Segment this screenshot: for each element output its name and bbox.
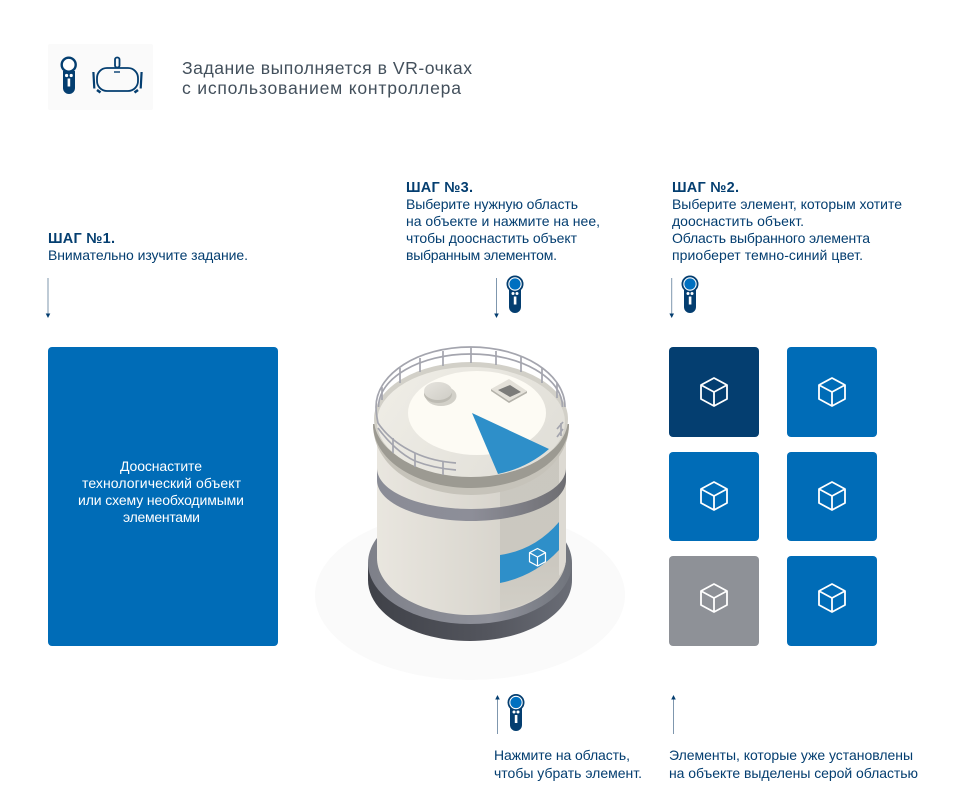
panel: task card: Дооснастите (120, 458, 202, 474)
roof dome (424, 382, 456, 406)
text block: step 3: выбранным элементом. (406, 247, 557, 263)
wall band (377, 468, 566, 521)
note: remove element: Нажмите на область, (494, 747, 630, 763)
tile: element 2 (787, 347, 877, 437)
tank wall (377, 420, 566, 615)
text block: step 2: дооснастить объект. (672, 213, 804, 229)
text block: step 3: на объекте и нажмите на нее, (406, 213, 600, 229)
text block: step 2: Область выбранного элемента (672, 230, 870, 246)
arrow: step 3 down (494, 278, 499, 318)
roof deck (377, 367, 565, 477)
panel: task card (48, 347, 278, 646)
icon: VR headset (93, 58, 142, 92)
text block: step 3: ШАГ №3. (406, 180, 473, 196)
text block: step 2: ШАГ №2. (672, 180, 739, 196)
arrow: installed up (671, 695, 676, 734)
note: remove element (494, 747, 642, 781)
heading: task intro (182, 58, 472, 98)
tile: element 6 (787, 556, 877, 646)
tank ground shadow (315, 510, 625, 680)
text block: step 1: Внимательно изучите задание. (48, 247, 248, 263)
blue roof sector (472, 413, 549, 474)
icon: controller (62, 58, 76, 94)
note: installed elements (669, 747, 918, 781)
text block: step 1: ШАГ №1. (48, 231, 115, 247)
panel: task card: или схему необходимыми (78, 492, 244, 508)
panel: task card: элементами (123, 509, 200, 525)
text block: step 2 (672, 180, 902, 263)
roof hatch (491, 379, 527, 403)
text block: step 3 (406, 180, 600, 263)
text block: step 1 (48, 231, 248, 263)
blue element area on wall (500, 522, 559, 583)
heading: task intro: с использованием контроллера (182, 78, 461, 98)
note: installed elements: на объекте выделены серой областью (669, 765, 918, 781)
text block: step 3: чтобы дооснастить объект (406, 230, 578, 246)
arrow: step 1 down (46, 278, 50, 318)
icon: controller step 3 (507, 276, 523, 313)
note: remove element: чтобы убрать элемент. (494, 765, 642, 781)
text block: step 2: Выберите элемент, которым хотите (672, 196, 902, 212)
roof rim (373, 362, 569, 495)
icon: controller remove (508, 695, 524, 731)
tile: selected element (669, 347, 759, 437)
tile: element 4 (787, 452, 877, 541)
arrow: remove up (495, 695, 500, 734)
icon: controller step 2 (682, 276, 698, 313)
railing (376, 347, 565, 475)
illustration: storage tank (315, 347, 625, 680)
roof highlight (408, 371, 546, 455)
text block: step 3: Выберите нужную область (406, 196, 578, 212)
tile: installed element (grey) (669, 556, 759, 646)
panel: VR headset and controller icons (48, 44, 153, 110)
text block: step 2: приоберет темно-синий цвет. (672, 247, 863, 263)
tank base (368, 502, 572, 641)
arrow: step 2 down (669, 278, 674, 318)
heading: task intro: Задание выполняется в VR-очках (182, 58, 472, 78)
tile: element 3 (669, 452, 759, 541)
note: installed elements: Элементы, которые уже установлены (669, 747, 913, 763)
panel: task card: технологический объект (82, 475, 242, 491)
